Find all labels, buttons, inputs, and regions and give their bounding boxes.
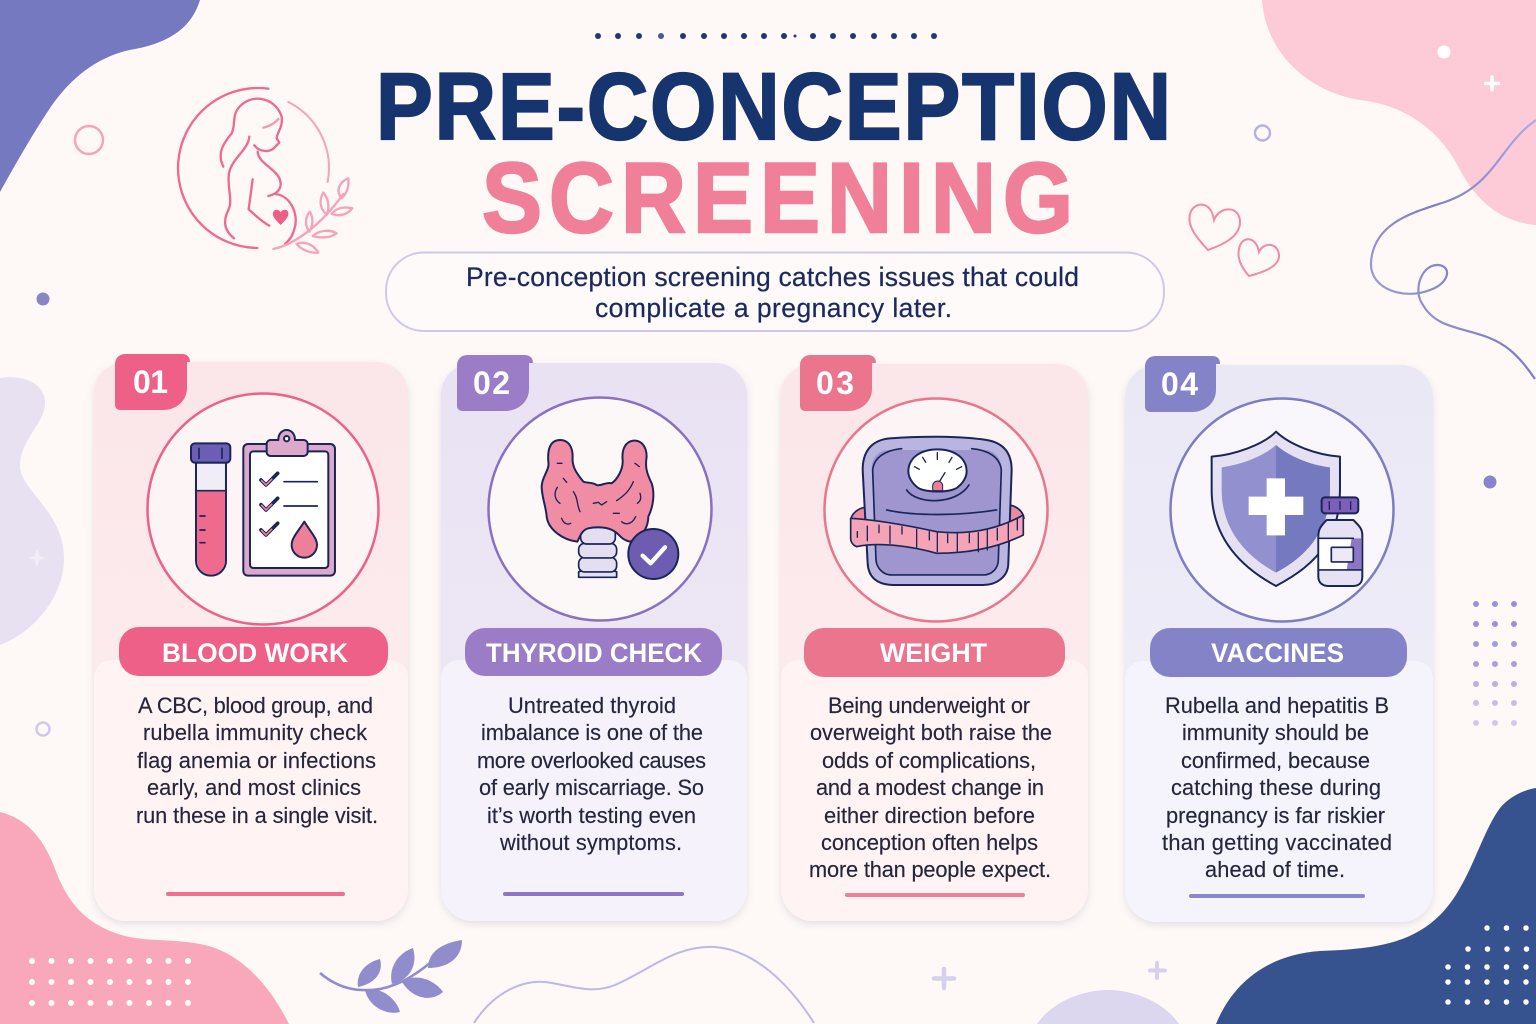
subtitle box: [386, 252, 1164, 331]
label pill: blood work: BLOOD WORK: [162, 638, 348, 668]
number tag 02: 02: [473, 365, 510, 401]
body text: weight: either direction before: [824, 803, 1035, 828]
label pill: thyroid check: THYROID CHECK: [486, 638, 702, 668]
blob: bottom lavender: [1037, 990, 1179, 1024]
subtitle text: [466, 262, 1079, 323]
body text: thyroid check: more overlooked causes: [477, 748, 706, 773]
body text: weight: more than people expect.: [809, 857, 1051, 882]
body text: weight: overweight both raise the: [810, 720, 1052, 745]
subtitle text: Pre-conception screening catches issues that could: [466, 262, 1079, 292]
body text: weight: Being underweight or: [828, 693, 1030, 718]
body text: weight: and a modest change in: [816, 775, 1044, 800]
body text: thyroid check: without symptoms.: [499, 830, 682, 855]
label pill: thyroid check: [465, 628, 722, 676]
blob: bottom-left pink: [0, 812, 289, 1024]
body text: vaccines: immunity should be: [1182, 720, 1369, 745]
body text: blood work: rubella immunity check: [143, 720, 367, 745]
decoration: bottom wave: [474, 947, 814, 1023]
body text: vaccines: pregnancy is far riskier: [1166, 803, 1385, 828]
label pill: blood work: [119, 627, 388, 676]
blob: left lavender: [0, 377, 64, 645]
body text: vaccines: confirmed, because: [1181, 748, 1370, 773]
body text: blood work: flag anemia or infections: [137, 748, 376, 773]
body text: blood work: run these in a single visit.: [136, 803, 378, 828]
body text: vaccines: Rubella and hepatitis B: [1165, 693, 1389, 718]
decoration: looping squiggle: [1371, 120, 1536, 379]
decoration: dot grid bottom-right: [1448, 928, 1530, 1002]
number tag 01: 01: [133, 364, 168, 400]
label pill: vaccines: [1150, 628, 1407, 677]
title line 2: SCREENING: [482, 143, 1073, 254]
body text: vaccines: than getting vaccinated: [1162, 830, 1392, 855]
blob: top-left: [0, 0, 200, 192]
number tag 03: 03: [816, 365, 854, 401]
accent bar: [845, 893, 1025, 897]
accent bar: [166, 892, 345, 896]
number tag 01: [115, 354, 190, 410]
title line 1: PRE-CONCEPTION: [376, 55, 1171, 160]
number tag 03: [800, 355, 876, 411]
icon: test tube and clipboard: [148, 394, 378, 624]
accent bar: [1189, 894, 1365, 898]
body text: thyroid check: [477, 693, 706, 855]
panel: blood work: [94, 354, 408, 921]
accent bar: [503, 892, 684, 896]
icon: pregnant woman logo: [178, 88, 352, 253]
label pill: weight: [804, 628, 1065, 677]
icon: hearts: [1189, 205, 1279, 276]
body text: blood work: early, and most clinics: [147, 775, 361, 800]
body text: weight: [809, 693, 1052, 882]
blob: top-right pink: [1262, 0, 1536, 225]
body text: vaccines: ahead of time.: [1205, 857, 1345, 882]
panel: weight: [781, 355, 1088, 921]
icon: lavender branch: [320, 940, 462, 1013]
body text: thyroid check: of early miscarriage. So: [479, 775, 704, 800]
blob: bottom-right navy: [1216, 788, 1536, 1024]
number tag 04: [1145, 356, 1220, 412]
panel: vaccines: [1125, 356, 1433, 922]
body text: blood work: [136, 693, 378, 828]
panel: thyroid check: [441, 355, 747, 921]
body text: thyroid check: imbalance is one of the: [481, 720, 703, 745]
body text: weight: conception often helps: [821, 830, 1038, 855]
body text: vaccines: catching these during: [1171, 775, 1381, 800]
icon: shield and vaccine vial: [1170, 398, 1394, 622]
decoration: top dots: [595, 33, 937, 39]
body text: thyroid check: Untreated thyroid: [508, 693, 676, 718]
label pill: weight: WEIGHT: [880, 638, 987, 668]
subtitle text: complicate a pregnancy later.: [595, 293, 952, 323]
icon: sparkle on left blob: [28, 549, 46, 567]
title: [376, 55, 1171, 254]
body text: blood work: A CBC, blood group, and: [138, 693, 373, 718]
label pill: vaccines: VACCINES: [1211, 638, 1344, 668]
icon: scale and tape measure: [824, 398, 1048, 622]
body text: vaccines: [1162, 693, 1392, 882]
icon: thyroid with check: [488, 398, 712, 620]
body text: weight: odds of complications,: [822, 748, 1036, 773]
decoration: dot grid right: [1476, 604, 1533, 723]
decoration: dot grid bottom-left: [32, 961, 190, 1003]
body text: thyroid check: it’s worth testing even: [487, 803, 696, 828]
number tag 04: 04: [1161, 366, 1198, 402]
number tag 02: [457, 355, 533, 411]
